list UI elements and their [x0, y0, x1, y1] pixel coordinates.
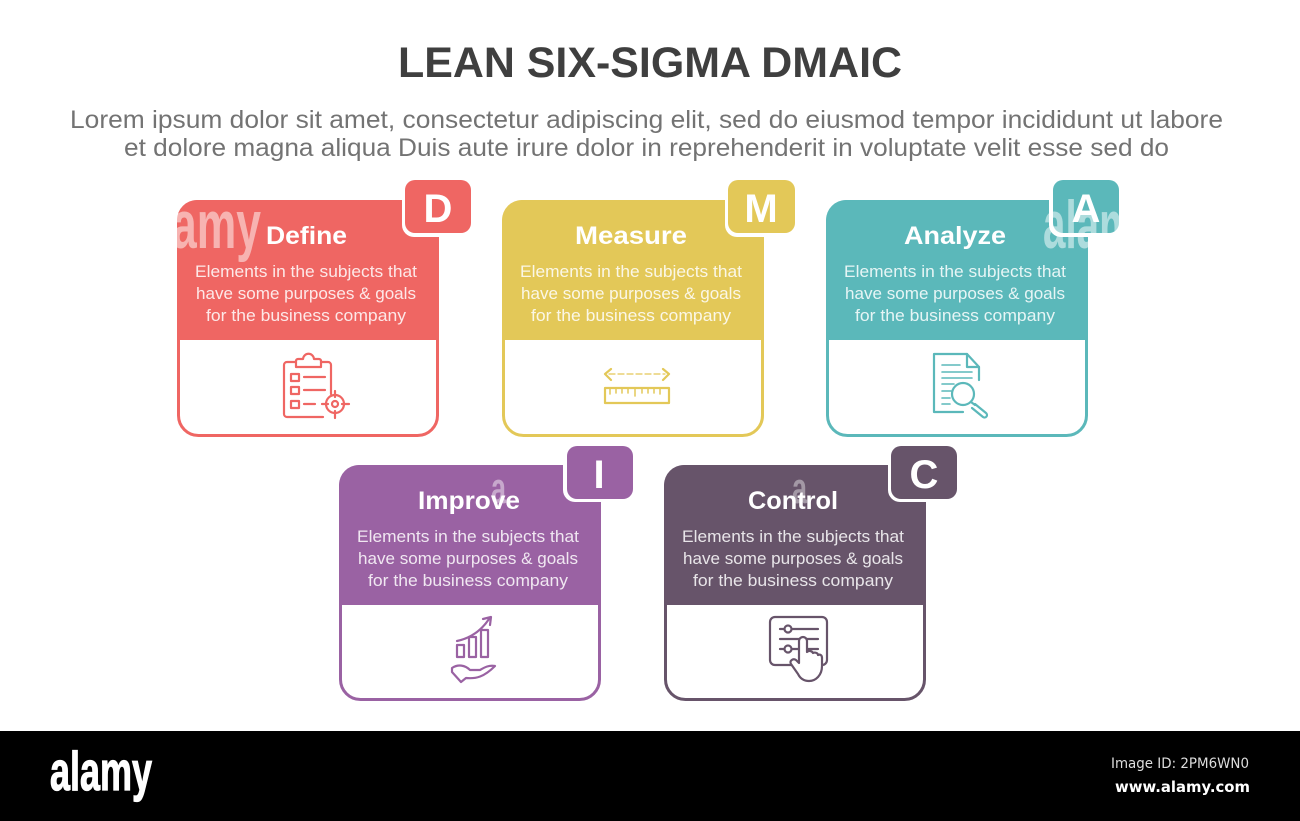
title: LEAN SIX-SIGMA DMAIC	[398, 39, 902, 87]
panel: Measure	[502, 178, 797, 436]
description: for the business company	[693, 571, 894, 590]
description: have some purposes & goals	[196, 284, 416, 303]
badge M: M	[744, 187, 778, 231]
description: Elements in the subjects that	[844, 262, 1066, 281]
watermark fragment: amy	[172, 187, 261, 263]
panel: Improve	[339, 444, 635, 700]
description: Elements in the subjects that	[357, 527, 579, 546]
description: have some purposes & goals	[683, 549, 903, 568]
badge M	[725, 178, 797, 237]
description: Elements in the subjects that	[682, 527, 904, 546]
watermark fragment: alam	[1043, 187, 1135, 263]
icon: growth chart over hand	[452, 617, 495, 682]
badge I	[563, 444, 635, 502]
heading Measure: Measure	[575, 222, 687, 250]
watermark fragment: a	[491, 464, 506, 513]
panel: Define	[172, 178, 473, 436]
badge C	[888, 444, 959, 502]
icon: sliders with pointing hand	[770, 617, 827, 681]
description: Elements in the subjects that	[195, 262, 417, 281]
watermark fragment: a	[792, 464, 807, 513]
subtitle text	[70, 106, 1223, 162]
subtitle text: et dolore magna aliqua Duis aute irure dolor in reprehenderit in voluptate velit esse sed do	[124, 134, 1169, 162]
badge C: C	[910, 453, 938, 497]
heading Control: Control	[748, 487, 838, 515]
description	[195, 262, 417, 325]
description	[682, 527, 904, 590]
icon: ruler with arrows	[605, 369, 669, 403]
description: for the business company	[368, 571, 569, 590]
description	[357, 527, 579, 590]
description: have some purposes & goals	[358, 549, 578, 568]
heading Analyze: Analyze	[904, 222, 1006, 250]
badge A	[1043, 178, 1135, 263]
description: have some purposes & goals	[521, 284, 741, 303]
description: for the business company	[206, 306, 407, 325]
icon: document with magnifier	[934, 354, 987, 417]
badge D: D	[424, 187, 452, 231]
description	[520, 262, 742, 325]
description	[844, 262, 1066, 325]
panel: Control	[664, 444, 959, 700]
icon: clipboard with target	[284, 354, 349, 418]
footer bar	[0, 731, 1300, 821]
heading Define: Define	[266, 222, 347, 250]
badge I: I	[593, 453, 605, 497]
description: have some purposes & goals	[845, 284, 1065, 303]
description: for the business company	[855, 306, 1056, 325]
subtitle text: Lorem ipsum dolor sit amet, consectetur adipiscing elit, sed do eiusmod tempor incididunt ut labore	[70, 106, 1223, 134]
badge A: A	[1072, 187, 1100, 231]
badge D	[402, 178, 473, 237]
heading Improve: Improve	[418, 487, 520, 515]
website: www.alamy.com	[1115, 778, 1250, 796]
description: for the business company	[531, 306, 732, 325]
panel: Analyze	[826, 178, 1135, 436]
image id: Image ID: 2PM6WN0	[1111, 756, 1249, 772]
footer logo: alamy	[50, 740, 152, 802]
description: Elements in the subjects that	[520, 262, 742, 281]
